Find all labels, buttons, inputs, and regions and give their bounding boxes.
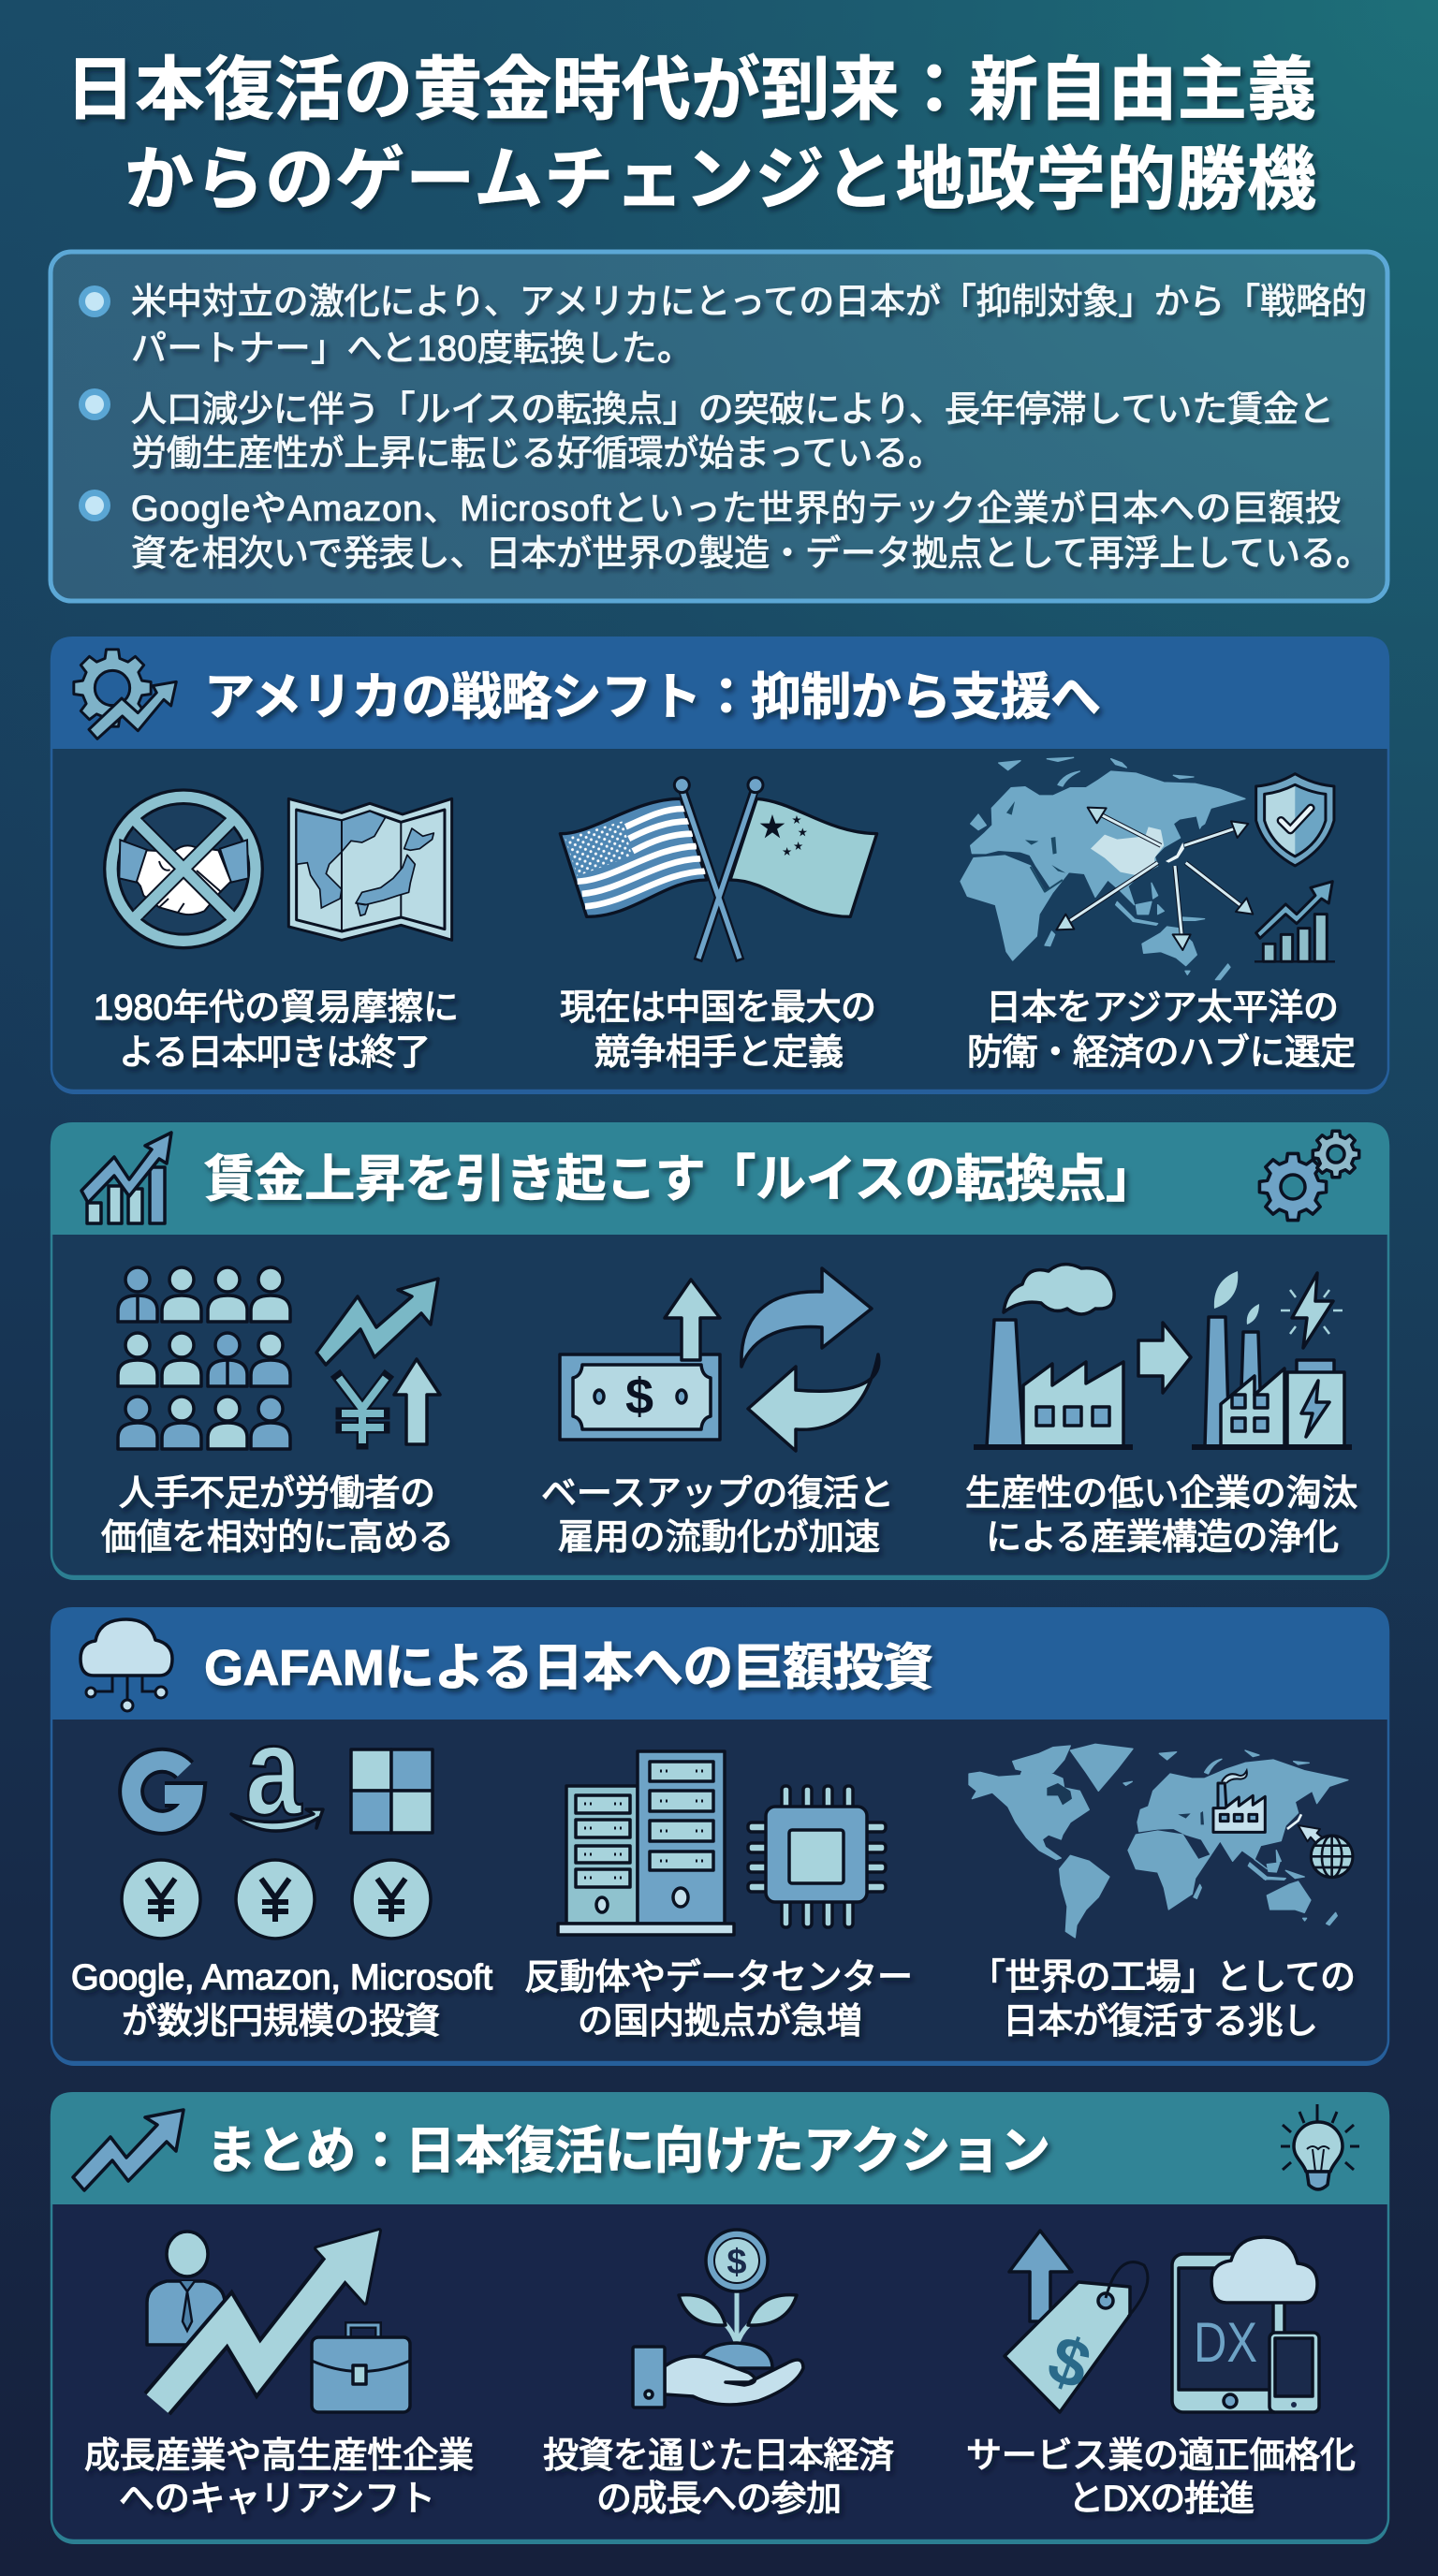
icon: price tag with arrow: $ bbox=[1039, 2321, 1100, 2405]
captions bbox=[71, 1958, 1356, 2042]
captions: 投資を通じた日本経済 bbox=[543, 2437, 894, 2476]
captions: 生産性の低い企業の淘汰 bbox=[965, 1474, 1357, 1514]
bullet 3: 資を相次いで発表し、日本が世界の製造・データ拠点として再浮上している。 bbox=[131, 534, 1372, 574]
captions bbox=[84, 2437, 1356, 2519]
icon: shield with check bbox=[1256, 774, 1334, 866]
captions: による産業構造の浄化 bbox=[986, 1518, 1339, 1558]
captions bbox=[94, 988, 1356, 1073]
captions: の国内拠点が急増 bbox=[578, 2002, 862, 2042]
bullet 2 bbox=[79, 388, 1334, 474]
panel: Lewis turning point bbox=[51, 1122, 1389, 1580]
icon: Japan hub world map with shield and chart bbox=[961, 757, 1335, 980]
captions: ベースアップの復活と bbox=[541, 1474, 894, 1514]
map: Asia Pacific bbox=[961, 757, 1245, 980]
icon: rising arrow bbox=[73, 2110, 183, 2190]
bullet 2: 労働生産性が上昇に転じる好循環が始まっている。 bbox=[131, 434, 944, 474]
icon: tablet cloud phone DX: DX bbox=[1194, 2311, 1257, 2374]
captions: が数兆円規模の投資 bbox=[122, 2002, 440, 2042]
captions: Google, Amazon, Microsoft bbox=[71, 1958, 492, 1998]
icon: world factory map bbox=[969, 1744, 1353, 1938]
captions: 雇用の流動化が加速 bbox=[558, 1518, 880, 1558]
icon: data center servers bbox=[558, 1751, 734, 1935]
captions: 成長産業や高生産性企業 bbox=[84, 2437, 474, 2476]
icon: factory on map bbox=[1213, 1771, 1265, 1832]
captions: 日本をアジア太平洋の bbox=[986, 988, 1339, 1028]
icon: banknote with arrows bbox=[560, 1268, 879, 1451]
icon: bars with rising arrow bbox=[81, 1133, 171, 1223]
icon: arrow and globe bbox=[1299, 1825, 1353, 1878]
heading: まとめ：日本復活に向けたアクション bbox=[206, 2123, 1050, 2179]
icon: gears bbox=[1259, 1131, 1359, 1221]
captions: 1980年代の貿易摩擦に bbox=[94, 988, 459, 1028]
captions: 競争相手と定義 bbox=[594, 1033, 844, 1073]
captions: 日本が復活する兆し bbox=[1003, 2002, 1318, 2042]
heading: アメリカの戦略シフト：抑制から支援へ bbox=[204, 669, 1101, 725]
icon: investing hand with coin plant bbox=[633, 2230, 803, 2408]
icon: light bulb bbox=[1281, 2104, 1359, 2189]
bullet 1: パートナー」へと180度転換した。 bbox=[131, 329, 693, 369]
icon: banned handshake and Japan map bbox=[103, 788, 452, 949]
panel: summary bbox=[51, 252, 1387, 601]
panel: US strategy shift bbox=[51, 637, 1389, 1094]
bullet 2: 人口減少に伴う「ルイスの転換点」の突破により、長年停滞していた賃金と bbox=[131, 390, 1334, 430]
captions: の成長への参加 bbox=[596, 2480, 842, 2519]
icon: crossed US and China flags bbox=[560, 778, 877, 961]
captions: 「世界の工場」としての bbox=[970, 1958, 1356, 1998]
captions: とDXの推進 bbox=[1068, 2480, 1255, 2519]
icon: price tag with arrow bbox=[1005, 2231, 1148, 2412]
panel: summary actions bbox=[51, 2092, 1389, 2544]
icon: cloud network bbox=[81, 1619, 172, 1711]
captions: サービス業の適正価格化 bbox=[966, 2437, 1356, 2476]
title: からのゲームチェンジと地政学的勝機 bbox=[125, 140, 1316, 218]
icon: tech logos: a bbox=[245, 1699, 302, 1841]
title bbox=[66, 51, 1316, 218]
captions: 防衛・経済のハブに選定 bbox=[967, 1033, 1356, 1073]
bullet 3: GoogleやAmazon、Microsoftといった世界的テック企業が日本への巨額投 bbox=[131, 490, 1341, 529]
icon: tablet cloud phone DX bbox=[1172, 2237, 1319, 2412]
bullet 1 bbox=[79, 283, 1367, 369]
bullet 3 bbox=[79, 490, 1372, 574]
bullet 1: 米中対立の激化により、アメリカにとっての日本が「抑制対象」から「戦略的 bbox=[131, 283, 1367, 322]
icon: gear with arrow bbox=[74, 650, 176, 739]
title: 日本復活の黄金時代が到来：新自由主義 bbox=[66, 51, 1316, 128]
icon: prohibited handshake bbox=[103, 788, 264, 949]
icon: rising bar chart bbox=[1255, 882, 1335, 961]
captions: よる日本叩きは終了 bbox=[119, 1033, 431, 1073]
captions bbox=[101, 1474, 1357, 1558]
captions: 人手不足が労働者の bbox=[119, 1474, 435, 1514]
icon: rising arrow and yen bbox=[316, 1279, 440, 1444]
icon: yen coins bbox=[122, 1860, 431, 1939]
captions: 現在は中国を最大の bbox=[560, 988, 876, 1028]
icon: folded map of Japan bbox=[288, 798, 452, 940]
captions: へのキャリアシフト bbox=[119, 2480, 435, 2519]
captions: 価値を相対的に高める bbox=[101, 1518, 454, 1558]
icon: workers bbox=[118, 1267, 290, 1449]
icon: semiconductor chip bbox=[748, 1786, 886, 1927]
icon: banknote with arrows: $ bbox=[625, 1368, 653, 1425]
icon: tech logos bbox=[131, 1699, 433, 1841]
heading: 賃金上昇を引き起こす「ルイスの転換点」 bbox=[204, 1151, 1156, 1208]
heading: GAFAMによる日本への巨額投資 bbox=[204, 1640, 933, 1696]
panel: GAFAM investment bbox=[51, 1607, 1389, 2066]
icon: investing hand with coin plant: $ bbox=[726, 2243, 747, 2282]
icon: career shift bbox=[147, 2231, 410, 2412]
captions: 反動体やデータセンター bbox=[524, 1958, 913, 1998]
icon: old factory to clean factory bbox=[974, 1265, 1352, 1447]
arrows from Japan bbox=[1056, 808, 1253, 950]
